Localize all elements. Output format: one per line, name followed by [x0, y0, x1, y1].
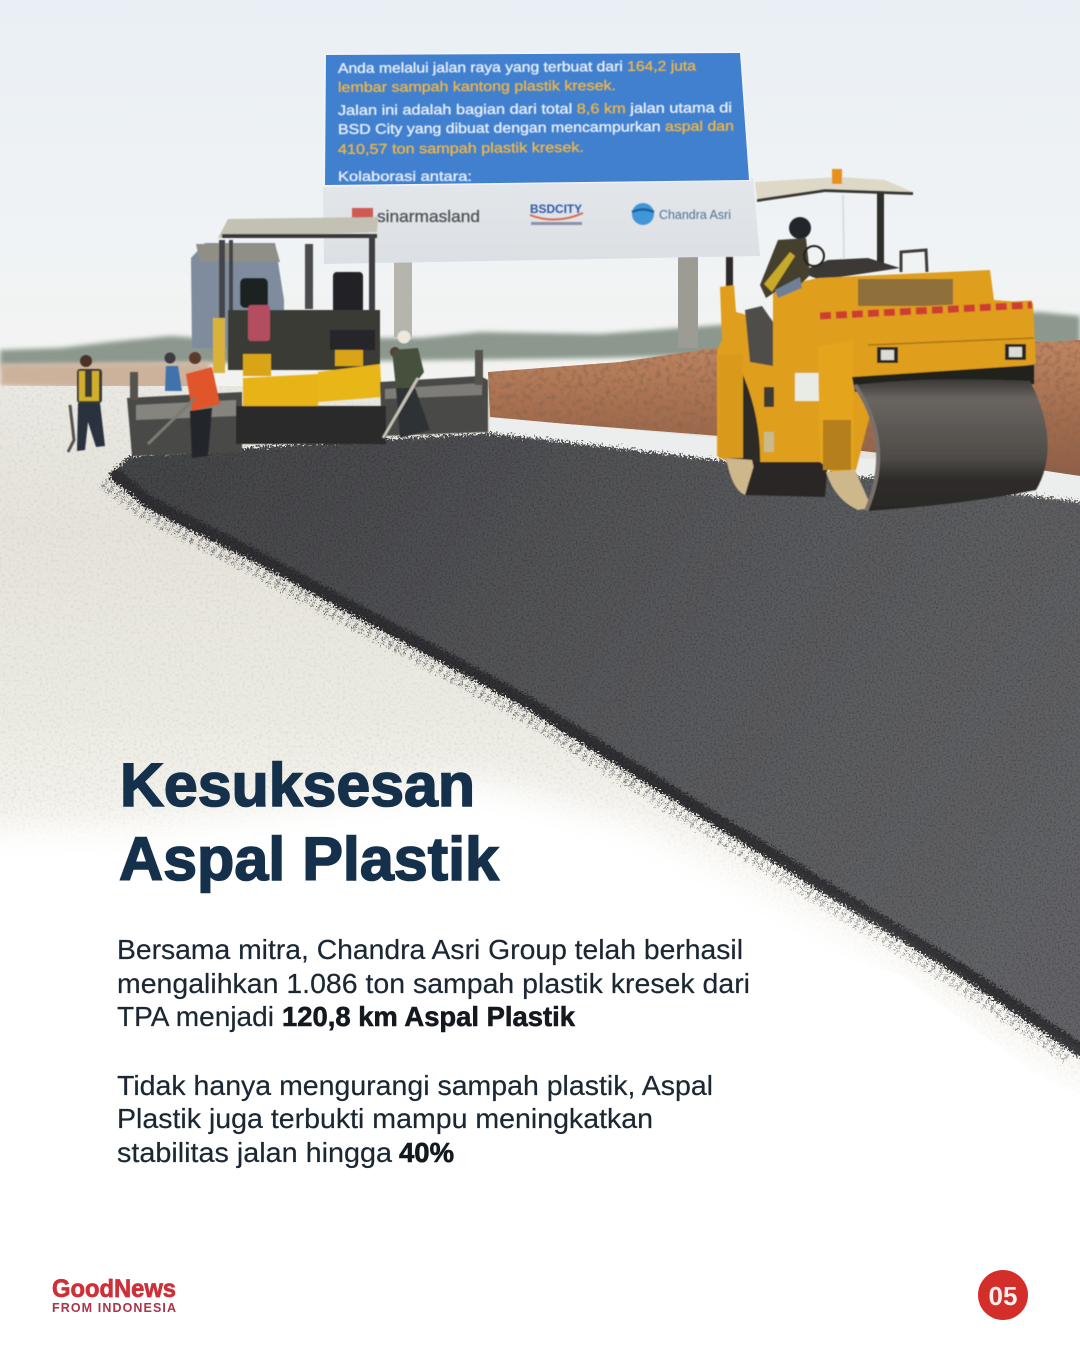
- billboard: [323, 51, 760, 348]
- worker blue: [164, 352, 182, 391]
- tree line: [0, 312, 1080, 366]
- worker right: [383, 330, 430, 438]
- drum: [855, 379, 1048, 511]
- page number badge: [978, 1270, 1028, 1320]
- paragraph 2: Plastik juga terbukti mampu meningkatkan: [117, 1103, 653, 1134]
- page number badge: 05: [989, 1281, 1017, 1311]
- paragraph 2: 40%: [399, 1137, 454, 1168]
- billboard text: 410,57 ton sampah plastik kresek.: [338, 139, 584, 157]
- workers: [68, 330, 430, 458]
- paragraph 1: mengalihkan 1.086 ton sampah plastik kresek dari: [117, 968, 750, 999]
- soil far left: [0, 362, 210, 392]
- billboard text: Anda melalui jalan raya yang terbuat dari 164,2 juta: [338, 57, 696, 76]
- billboard text: Jalan ini adalah bagian dari total 8,6 km jalan utama di: [338, 99, 732, 118]
- soil bank right: [488, 340, 1080, 476]
- billboard logos: Chandra Asri: [659, 207, 731, 222]
- logo: GoodNews from Indonesia: [52, 1275, 176, 1315]
- billboard text: Kolaborasi antara:: [338, 168, 472, 184]
- dark hood underside: [852, 365, 1034, 392]
- gravel shoulder: [0, 386, 1080, 1186]
- paragraph 1: [117, 934, 750, 1032]
- paver machine: [127, 217, 488, 456]
- operator: [760, 217, 824, 298]
- paragraph 2: [117, 1070, 713, 1168]
- billboard logos: [352, 202, 731, 226]
- title: Kesuksesan: [120, 751, 475, 819]
- paragraph 2: Tidak hanya mengurangi sampah plastik, Aspal: [117, 1070, 713, 1101]
- worker left: [68, 355, 105, 452]
- paragraph 1: TPA menjadi: [117, 1001, 274, 1032]
- billboard logos: sinarmasland: [377, 207, 480, 226]
- billboard logos: BSDCITY: [530, 202, 582, 216]
- front frame: [818, 340, 853, 472]
- billboard text: BSD City yang dibuat dengan mencampurkan aspal dan: [338, 118, 734, 137]
- body: [717, 270, 1036, 470]
- billboard text: lembar sampah kantong plastik kresek.: [338, 77, 616, 95]
- asphalt road: [104, 433, 1080, 1075]
- paragraph 2: stabilitas jalan hingga: [117, 1137, 392, 1168]
- front wheel rim: [826, 470, 872, 510]
- lower white fade: [0, 780, 1080, 1350]
- logo: GoodNews from Indonesia: FROM INDONESIA: [52, 1301, 176, 1315]
- curb: [490, 417, 1080, 502]
- title: Aspal Plastik: [119, 825, 499, 893]
- billboard text: [338, 57, 734, 184]
- paragraph 1: 120,8 km Aspal Plastik: [282, 1001, 575, 1032]
- rear wheel: [726, 375, 760, 490]
- worker orange: [148, 352, 220, 458]
- paragraph 1: Bersama mitra, Chandra Asri Group telah berhasil: [117, 934, 743, 965]
- logo: GoodNews from Indonesia: GoodNews: [52, 1275, 176, 1303]
- road roller: [717, 169, 1048, 511]
- title: [119, 751, 499, 893]
